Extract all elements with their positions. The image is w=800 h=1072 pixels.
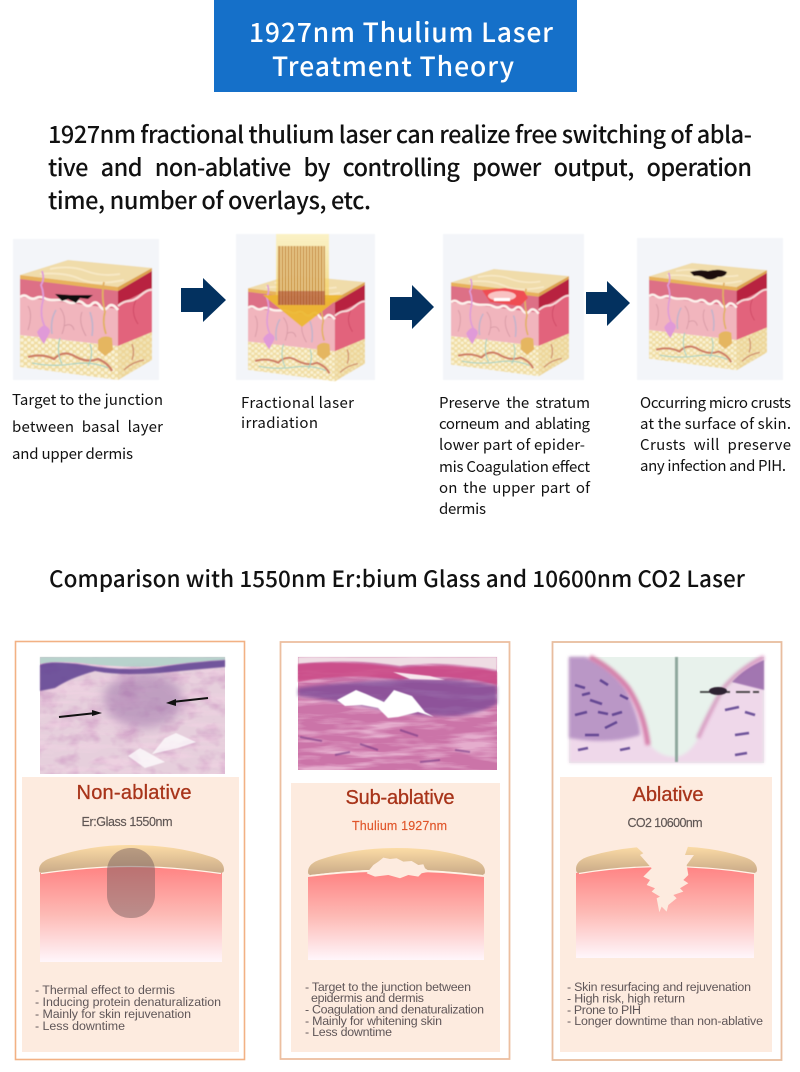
peach info card xyxy=(560,777,772,1052)
bullet list: - Less downtime xyxy=(305,1025,392,1039)
step 1: target junction xyxy=(12,239,163,464)
step 4 caption xyxy=(640,392,791,476)
step 4 caption: Crusts will preserve xyxy=(640,434,791,455)
intro paragraph: time, number of overlays, etc. xyxy=(48,182,371,216)
bullet list: - Longer downtime than non-ablative xyxy=(567,1014,763,1028)
bullet list: - Coagulation and denaturalization xyxy=(305,1002,484,1016)
step 4 caption: Occurring micro crusts xyxy=(640,392,791,413)
label: Thulium 1927nm: Thulium 1927nm xyxy=(352,819,447,833)
step 3 caption: mis Coagulation effect xyxy=(439,456,590,477)
bullet list: - Less downtime xyxy=(35,1019,125,1033)
step 1 skin illustration xyxy=(13,239,159,380)
bullet list xyxy=(567,980,763,1028)
label: Er:Glass 1550nm: Er:Glass 1550nm xyxy=(82,815,172,829)
skin diagram: thermal zone xyxy=(39,845,224,962)
step 3 caption: lower part of epider- xyxy=(439,434,585,455)
title banner: 1927nm Thulium Laser xyxy=(249,11,553,50)
step 3 caption: Preserve the stratum xyxy=(439,392,590,413)
skin diagram: ablated crater xyxy=(576,846,757,958)
histology photo: sub-ablative xyxy=(298,657,497,770)
step 3 caption: on the upper part of xyxy=(439,477,591,498)
bullet list: epidermis and dermis xyxy=(311,991,424,1005)
step 4 skin illustration xyxy=(637,238,783,380)
arrow 3 xyxy=(586,281,630,326)
bullet list: - Mainly for whitening skin xyxy=(305,1014,442,1028)
bullet list xyxy=(305,980,484,1039)
step 2 caption: irradiation xyxy=(241,412,318,433)
bullet list: - Thermal effect to dermis xyxy=(35,983,175,997)
arrow 2 xyxy=(390,285,434,329)
heading: ablative: Ablative xyxy=(632,784,704,806)
intro paragraph xyxy=(48,116,752,216)
panel: ablative xyxy=(552,642,782,1060)
bullet list xyxy=(35,983,221,1033)
peach info card xyxy=(22,777,239,1052)
histology photo: ablative xyxy=(569,657,764,763)
peach info card xyxy=(291,783,500,1052)
step 2: laser irradiation xyxy=(236,234,375,433)
histology photo: non-ablative xyxy=(40,657,225,774)
bullet list: - High risk, high return xyxy=(567,992,685,1006)
heading: sub-ablative: Sub-ablative xyxy=(346,787,454,809)
title banner: Treatment Theory xyxy=(272,45,515,84)
bullet list: - Target to the junction between xyxy=(305,980,471,994)
bullet list: - Prone to PIH xyxy=(567,1003,641,1017)
arrow 1 xyxy=(181,278,226,322)
step 3 caption xyxy=(439,392,591,519)
intro paragraph: 1927nm fractional thulium laser can realize free switching of abla- xyxy=(48,116,752,150)
panel: non-ablative xyxy=(16,642,244,1060)
bullet list: - Inducing protein denaturalization xyxy=(35,995,221,1009)
step 1 caption: and upper dermis xyxy=(12,443,133,464)
step 3 skin illustration xyxy=(443,234,584,380)
bullet list: - Skin resurfacing and rejuvenation xyxy=(567,980,751,994)
intro paragraph: tive and non-ablative by controlling power output, operation xyxy=(48,149,752,183)
heading: non-ablative: Non-ablative xyxy=(76,782,192,804)
step 2 caption xyxy=(241,392,354,433)
bullet list: - Mainly for skin rejuvenation xyxy=(35,1007,191,1021)
step 1 caption: Target to the junction xyxy=(12,389,163,410)
step 1 caption: between basal layer xyxy=(12,416,163,437)
step 4: micro crusts xyxy=(637,238,791,476)
step 3: ablating epidermis xyxy=(439,234,591,519)
step 4 caption: at the surface of skin. xyxy=(640,413,791,434)
panel: sub-ablative xyxy=(280,642,510,1059)
title banner xyxy=(214,0,577,92)
step 3 caption: corneum and ablating xyxy=(439,413,591,434)
step 1 caption xyxy=(12,389,163,464)
label: CO2 10600nm: CO2 10600nm xyxy=(628,816,702,830)
step 2 skin illustration with laser xyxy=(236,234,375,381)
step 3 caption: dermis xyxy=(439,498,486,519)
step 4 caption: any infection and PIH. xyxy=(640,455,786,476)
skin diagram: junction zone xyxy=(308,848,485,960)
comparison heading: Comparison with 1550nm Er:bium Glass and 10600nm CO2 Laser xyxy=(49,562,746,594)
step 2 caption: Fractional laser xyxy=(241,392,354,413)
